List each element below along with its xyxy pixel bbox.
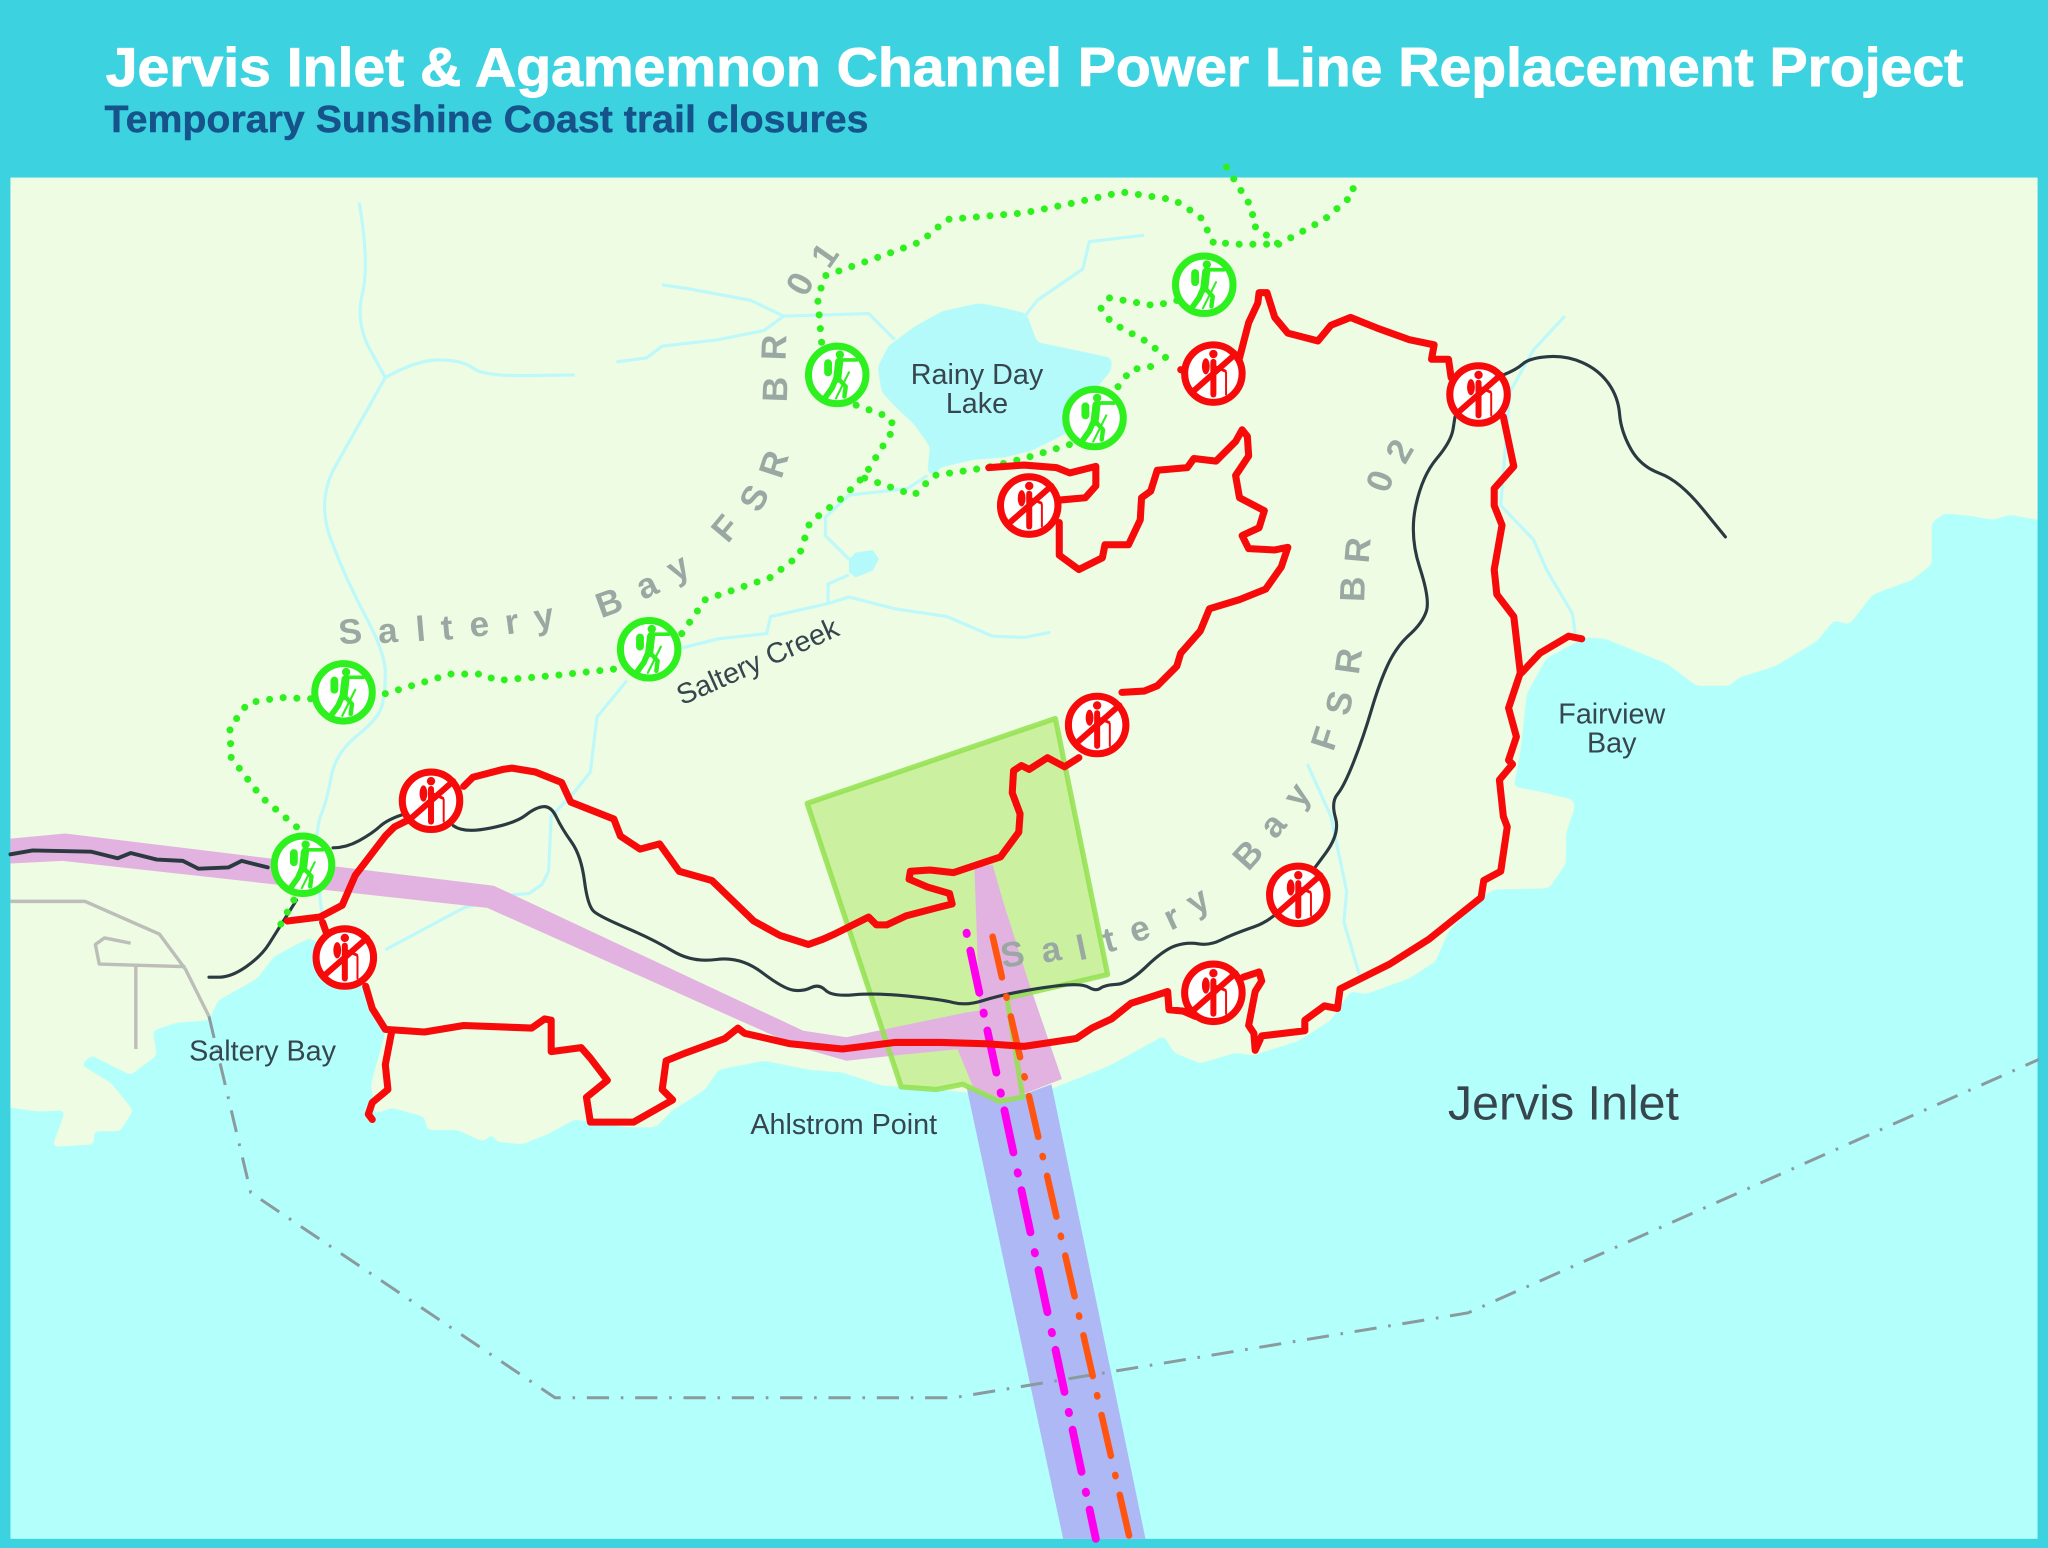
road label: Saltery Bay FSR BR 02: Saltery Bay FSR BR 02	[997, 433, 1422, 976]
icon: closed trail 3	[1000, 477, 1058, 534]
label: Saltery Creek: Saltery Creek	[672, 612, 844, 712]
label: Jervis Inlet: Jervis Inlet	[1448, 1077, 1679, 1131]
label: Rainy Day Lake: Lake	[946, 388, 1008, 420]
icon: open trail hiker 2	[1066, 389, 1123, 447]
lake: Rainy Day Lake	[878, 303, 1112, 476]
icon: closed trail 4	[1068, 696, 1126, 754]
label: Ahlstrom Point: Ahlstrom Point	[750, 1109, 937, 1141]
cable alignment: orange	[993, 937, 1130, 1539]
cable alignment: magenta	[967, 933, 1096, 1539]
icon: closed trail 5	[402, 772, 460, 830]
streams	[316, 202, 1575, 976]
label: Fairview Bay: Bay	[1587, 727, 1637, 759]
icon: open trail hiker 1	[808, 346, 866, 404]
label: Rainy Day Lake: Rainy Day	[911, 359, 1044, 391]
icon: open trail hiker 4	[620, 621, 678, 678]
horizontal power line corridor	[10, 833, 1006, 1061]
forest service roads	[10, 356, 1725, 1004]
icon: open trail hiker 5	[315, 664, 372, 721]
submarine cable corridor	[967, 1084, 1145, 1539]
pond	[849, 550, 879, 577]
icon: closed trail 2	[1450, 366, 1507, 423]
vertical power line corridor	[957, 865, 1062, 1101]
label: Fairview Bay: Fairview	[1558, 699, 1665, 731]
green work area	[807, 718, 1108, 1101]
land	[0, 157, 2048, 1147]
green work area outline	[807, 718, 1108, 1101]
icon: open trail hiker 6	[274, 836, 332, 894]
icon: closed trail 6	[316, 929, 374, 986]
icon: closed trail 7	[1270, 866, 1327, 924]
subtitle: Temporary Sunshine Coast trail closures	[104, 99, 869, 141]
road label: Saltery Bay FSR BR 01: Saltery Bay FSR BR 01	[337, 236, 847, 653]
open trails: green dotted	[230, 167, 1353, 931]
label: Saltery Bay: Saltery Bay	[189, 1036, 337, 1068]
icon: open trail hiker 3	[1176, 256, 1233, 314]
closed trails: red	[287, 293, 1582, 1122]
icon: closed trail 1	[1185, 345, 1242, 402]
icon: closed trail 8	[1185, 964, 1242, 1022]
title: Jervis Inlet & Agamemnon Channel Power Line Replacement Project	[106, 36, 1963, 98]
grey access road	[10, 901, 209, 1049]
boundary dash-dot line	[209, 1016, 2039, 1398]
